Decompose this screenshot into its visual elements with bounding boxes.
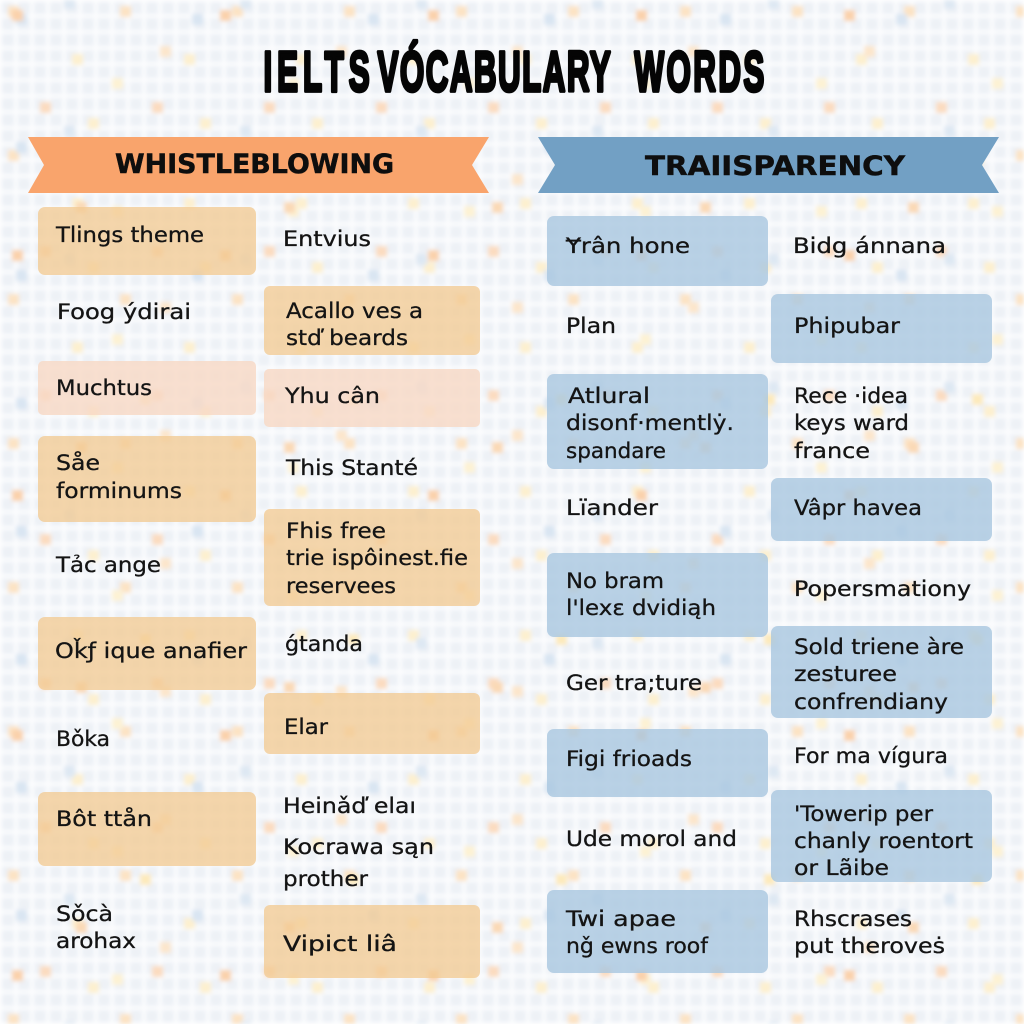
term card: Elar [264,693,480,754]
term card: Bot ttan [38,792,256,866]
term: Heinad elai Kocrawa san prother [283,794,434,891]
term card: Yhu can: Yhu cân [284,384,380,408]
term card: Vipict lia: Vipict liâ [283,932,397,956]
term: Tac ange: Tảc ange [55,553,161,577]
term card: Fhis free: Fhis free [286,519,386,543]
term card: Towerip per [771,790,992,882]
term card: Tlings theme [38,207,256,275]
term: Soca arohax: Sǒcà [56,902,113,926]
term: Soca arohax [56,902,136,953]
term card: Acallo ves a std beards [264,286,480,355]
term card: Atlural disonfmently spandare: spandare [566,439,666,463]
term: Rece idea keys ward france [794,384,909,463]
heading banner: whistleblowing: WHISTLEBLOWING [115,149,394,180]
term card: Muchtus: Muchtus [56,376,152,400]
term: Foog ydirai: Foog ýdirai [57,300,191,324]
term: Liander: Lïander [566,496,658,520]
term: Rece idea keys ward france: france [794,439,870,463]
term card: No bram: No bram [566,569,664,593]
term: Soca arohax: arohax [56,929,136,953]
term: Rece idea keys ward france: Rece ·idea [794,384,908,408]
term card: Phipubar [771,294,992,363]
term card: Sae forminums: forminums [56,479,182,503]
term: Ger trature: Ger tra;ture [566,671,702,695]
term card: Twi apae: nǧ ewns roof [566,934,709,958]
term card: Sae forminums [38,436,256,522]
title: WORDS [634,39,764,103]
term card: Tlings theme: Tlings theme [55,223,204,247]
heading banner: transparency: TRAIISPARENCY [645,151,905,182]
term: Ude morol and: Ude morol and [566,827,737,851]
term card: Mran hone [547,216,768,286]
term card: Towerip per: chanly roentort [794,829,973,853]
term card: Sold triene are [771,626,992,718]
term: Plan: Plan [566,314,616,338]
term: Popersmationy: Popersmationy [794,577,971,601]
term card: Mran hone: Ɏrân hone [565,234,690,258]
term card: Atlural disonfmently spandare [547,374,768,469]
term card: Muchtus [38,361,256,415]
term: Heinad elai Kocrawa san prother: Kocrawa sąn [283,835,434,859]
term card: Acallo ves a std beards: Acallo ves a [286,299,423,323]
term: This Stante: This Stanté [285,456,418,480]
term card: Fhis free: trie ispôinest.ﬁe [286,546,468,570]
term: For ma vigura: For ma vígura [794,744,948,768]
term card: Sold triene are: Sold triene àre [794,635,964,659]
term card: Off ique anafier: Oǩƒ ique anafier [55,638,247,663]
term card: Bot ttan: Bôt ttån [56,806,152,831]
term card: Towerip per: 'Towerip per [794,802,933,826]
term card: Vipict lia [264,905,480,978]
term: Heinad elai Kocrawa san prother: prother [283,867,368,891]
term: Gtanda: ǵtanda [285,632,363,656]
panel: whistleblowing column [28,137,489,978]
term card: Vapr havea [771,478,992,541]
term card: Phipubar: Phipubar [794,314,900,338]
term: Entvius: Entvius [283,227,371,251]
term card: Yhu can [264,369,480,427]
term card: Fhis free [264,509,480,606]
term: Heinad elai Kocrawa san prother: Heinǎď elaı [283,794,416,818]
title: IELTS [264,39,370,103]
title [264,39,764,103]
term card: Figi frioads: Figi frioads [566,747,692,771]
title: VÓCABULARY [378,39,611,103]
term card: Twi apae [547,890,768,973]
term card: No bram [547,553,768,637]
term card: Atlural disonfmently spandare: Atlural [568,384,650,408]
term card: Fhis free: reservees [286,574,396,598]
panel: transparency column [538,137,999,973]
term card: Off ique anafier [38,617,256,690]
term card: No bram: l'lexɛ dvidiąh [566,596,716,620]
term: Rhscrases put theroves: put theroveṡ [794,934,945,958]
term card: Figi frioads [547,729,768,797]
term card: Sae forminums: Såe [56,450,100,475]
term card: Atlural disonfmently spandare: disonf·mentlẏ. [566,411,734,435]
term card: Towerip per: or Lãibe [794,856,889,880]
term: Rhscrases put theroves: Rhscrases [794,907,912,931]
heading banner: whistleblowing [28,137,489,193]
term card: Vapr havea: Vâpr havea [794,496,922,520]
heading banner: transparency [538,137,999,193]
term card: Acallo ves a std beards: stď beards [286,326,408,350]
term: Rhscrases put theroves [794,907,945,958]
term: Boka: Bǒka [56,727,110,751]
term card: Sold triene are: zesturee [794,662,897,686]
term: Rece idea keys ward france: keys ward [794,411,909,435]
term card: Sold triene are: confrendiany [794,690,948,714]
term card: Twi apae: Twi apae [565,907,676,931]
term card: Elar: Elar [284,715,328,739]
term: Bidg annana: Bidg ánnana [793,234,946,258]
